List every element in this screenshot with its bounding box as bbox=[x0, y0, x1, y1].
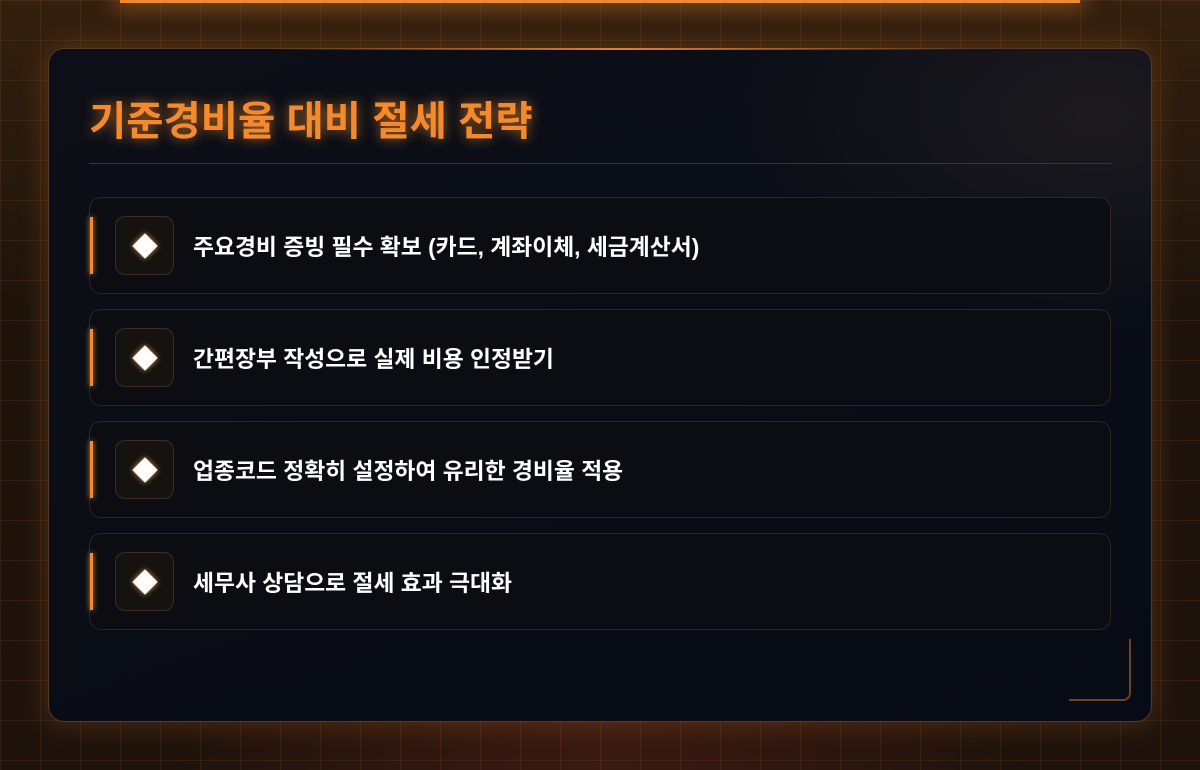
icon: diamond bbox=[115, 216, 174, 275]
icon: diamond bbox=[115, 552, 174, 611]
corner bracket bbox=[1069, 639, 1131, 701]
text 3: 업종코드 정확히 설정하여 유리한 경비율 적용 bbox=[193, 458, 623, 484]
item 4 bbox=[89, 533, 1111, 630]
icon: diamond bbox=[115, 328, 174, 387]
item 1 bbox=[89, 197, 1111, 294]
text 2: 간편장부 작성으로 실제 비용 인정받기 bbox=[193, 346, 554, 372]
title: 기준경비율 대비 절세 전략 bbox=[89, 98, 533, 144]
text 4: 세무사 상담으로 절세 효과 극대화 bbox=[193, 570, 512, 596]
text 1: 주요경비 증빙 필수 확보 (카드, 계좌이체, 세금계산서) bbox=[193, 234, 699, 260]
item 2 bbox=[89, 309, 1111, 406]
icon: diamond bbox=[115, 440, 174, 499]
item 3 bbox=[89, 421, 1111, 518]
